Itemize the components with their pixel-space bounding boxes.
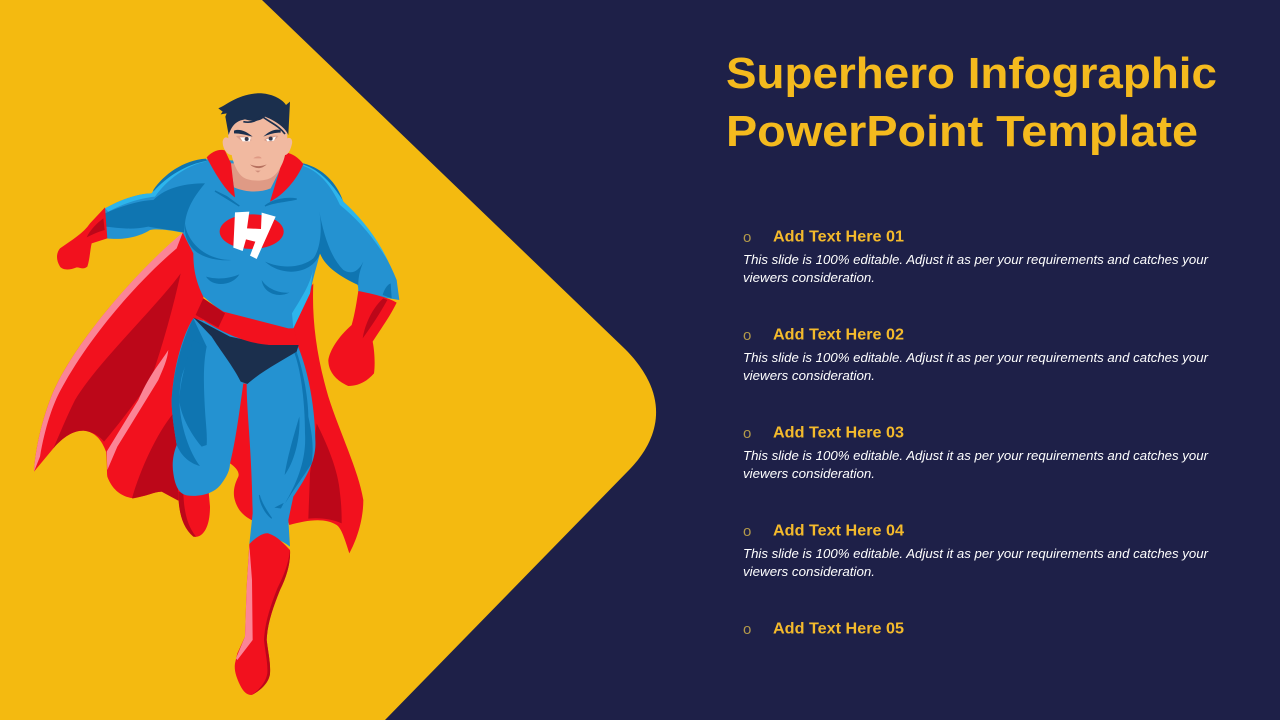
cape: right and centre [230, 283, 363, 553]
list item 02 [743, 326, 1209, 383]
boot [235, 533, 290, 695]
list item 04: o [743, 523, 751, 540]
list item 01 [743, 228, 1209, 285]
cape: left [34, 233, 203, 501]
list item 01: Add Text Here 01 [773, 228, 904, 246]
title [726, 49, 1217, 156]
neck and collar [207, 150, 303, 202]
title: Superhero Infographic [726, 49, 1217, 98]
list item 05: Add Text Here 05 [773, 620, 904, 638]
list item 03: o [743, 425, 751, 442]
legs [172, 318, 315, 547]
list item 04: viewers consideration. [743, 564, 875, 579]
list item 02: viewers consideration. [743, 368, 875, 383]
list item 01: o [743, 229, 751, 246]
yellow arrow panel [0, 0, 656, 720]
title: PowerPoint Template [726, 107, 1198, 156]
list item 02: This slide is 100% editable. Adjust it as per your requirements and catches your [743, 350, 1209, 365]
list item 04: This slide is 100% editable. Adjust it as per your requirements and catches your [743, 546, 1209, 561]
list item 03: This slide is 100% editable. Adjust it as per your requirements and catches your [743, 448, 1209, 463]
list item 02: Add Text Here 02 [773, 326, 904, 344]
hair [218, 93, 290, 135]
list item 04 [743, 522, 1209, 579]
list item 03: Add Text Here 03 [773, 424, 904, 442]
head [218, 93, 292, 181]
torso and arms [105, 159, 399, 330]
list item 03 [743, 424, 1209, 481]
illustration: superhero [34, 93, 399, 695]
list item 02: o [743, 327, 751, 344]
list item 04: Add Text Here 04 [773, 522, 904, 540]
eyes and brows [234, 130, 281, 142]
gloves [57, 207, 397, 386]
list item 01: viewers consideration. [743, 270, 875, 285]
list item 01: This slide is 100% editable. Adjust it as per your requirements and catches your [743, 252, 1209, 267]
list item 03: viewers consideration. [743, 466, 875, 481]
back foot [178, 488, 210, 537]
chest emblem [220, 212, 284, 259]
list item 05: o [743, 621, 751, 638]
belt and shorts [193, 298, 299, 384]
